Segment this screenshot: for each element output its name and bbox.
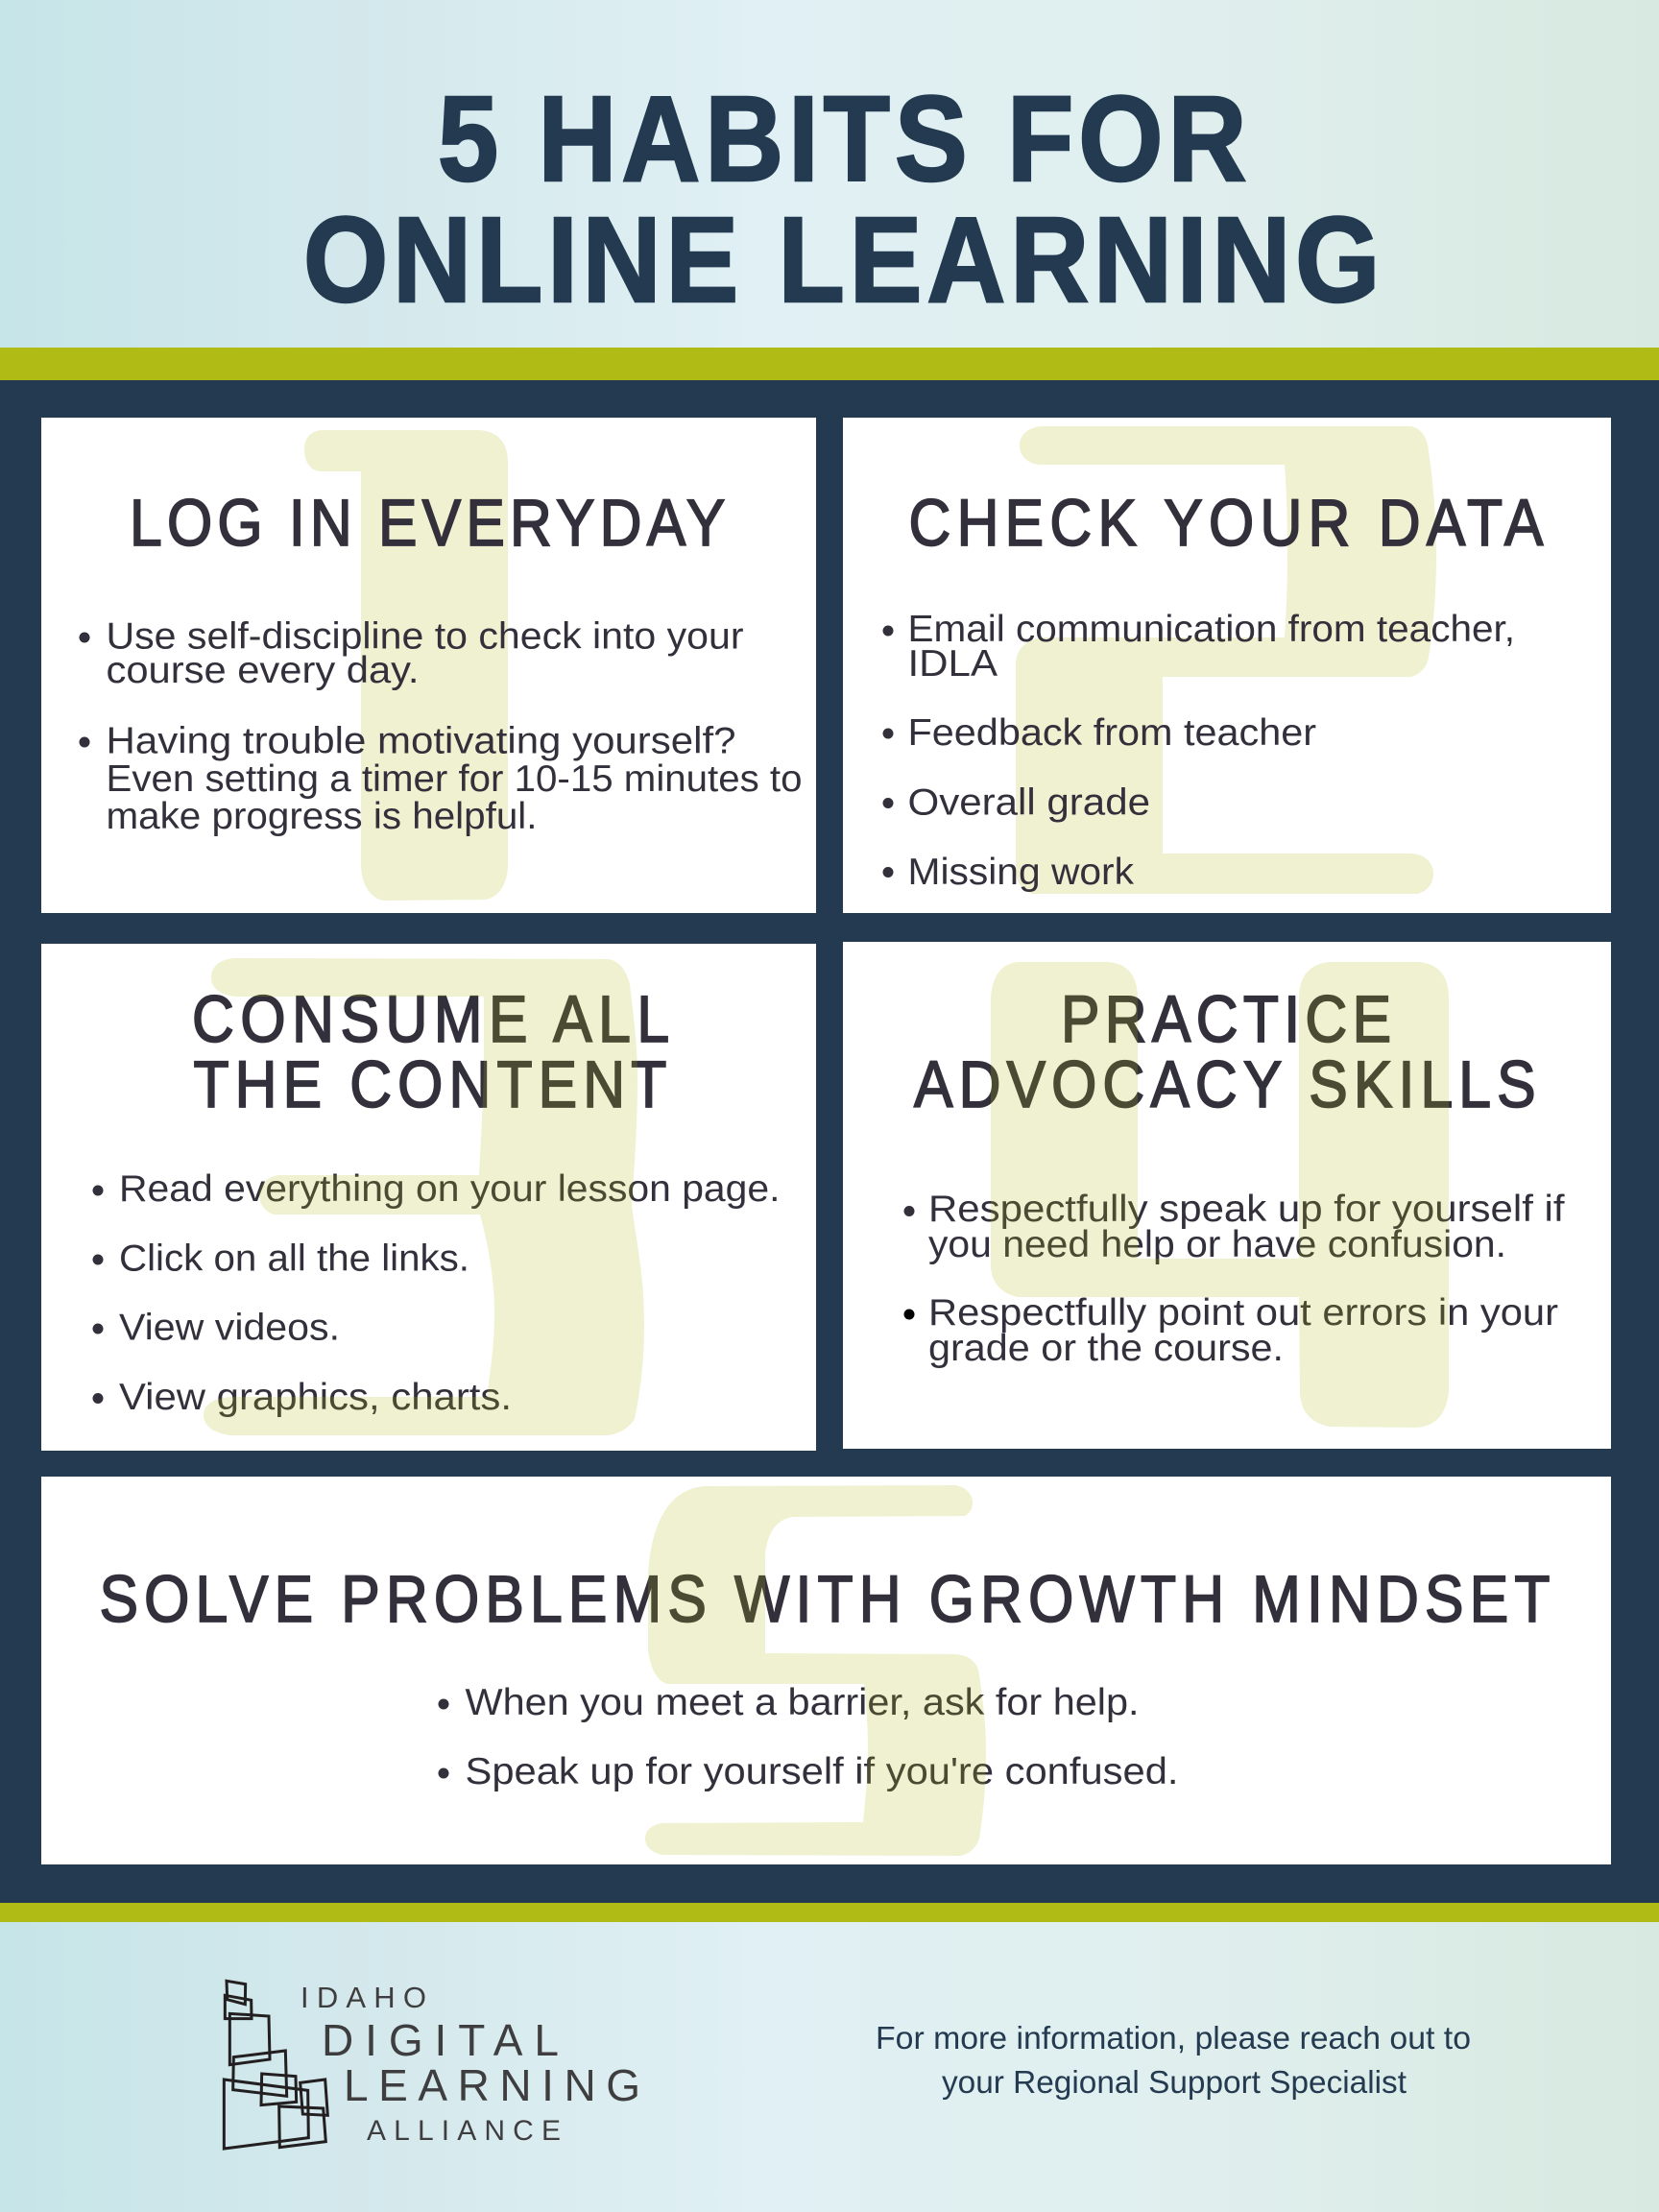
bullet list: content: View videos. <box>119 1308 340 1348</box>
footer contact note: For more information, please reach out to <box>876 2020 1471 2056</box>
logo: idaho digital learning alliance <box>224 1981 640 2149</box>
bullet list: advocacy: Respectfully point out errors in your <box>928 1292 1558 1334</box>
logo wordmark: ALLIANCE <box>367 2115 561 2147</box>
bullet list: data: Feedback from teacher <box>908 712 1316 754</box>
bullet list: data: Overall grade <box>908 781 1150 824</box>
footer background <box>0 1922 1659 2212</box>
bullet list: log in: Having trouble motivating yourself? <box>106 720 735 762</box>
bullet list: data <box>883 609 1515 893</box>
bullet list: advocacy: you need help or have confusion. <box>928 1224 1506 1265</box>
numeral 3 <box>204 958 644 1435</box>
icon: stacked rectangles <box>224 1981 327 2149</box>
title: 5 HABITS FOR <box>438 71 1246 206</box>
bullet list: data: IDLA <box>908 643 998 685</box>
header background <box>0 0 1659 348</box>
numeral 5 <box>645 1485 986 1856</box>
bullet list: growth mindset: When you meet a barrier, ask for help. <box>465 1682 1139 1723</box>
logo wordmark: IDAHO <box>301 1981 426 2014</box>
footer contact note: your Regional Support Specialist <box>942 2064 1407 2100</box>
title: ONLINE LEARNING <box>303 192 1380 327</box>
logo wordmark: LEARNING <box>344 2060 640 2110</box>
panel: consume all the content <box>41 944 816 1451</box>
panel: check your data <box>843 418 1611 913</box>
heading: log in everyday: LOG IN EVERYDAY <box>130 485 725 560</box>
bullet list: growth mindset: Speak up for yourself if you're confused. <box>465 1751 1179 1792</box>
bullet list: content: View graphics, charts. <box>119 1377 512 1418</box>
numeral 1 <box>304 430 508 901</box>
bullet list: advocacy: Respectfully speak up for yourself if <box>928 1189 1565 1230</box>
bullet list: advocacy <box>904 1189 1565 1369</box>
logo wordmark <box>301 1981 640 2147</box>
heading: consume all the content <box>192 981 669 1121</box>
bullet list: log in: course every day. <box>106 650 420 691</box>
panel: practice advocacy skills <box>843 942 1611 1449</box>
bullet list: log in: make progress is helpful. <box>106 796 538 837</box>
bullet list: content <box>92 1168 780 1418</box>
numeral 4 <box>991 962 1449 1428</box>
heading: practice advocacy skills: PRACTICE <box>1061 981 1391 1056</box>
logo wordmark: DIGITAL <box>322 2015 559 2065</box>
heading: solve problems: SOLVE PROBLEMS WITH GROWTH MINDSET <box>100 1561 1550 1636</box>
heading: consume all the content: CONSUME ALL <box>192 981 669 1056</box>
bullet list: growth mindset <box>438 1682 1179 1792</box>
numeral 2 <box>1016 426 1436 894</box>
bullet list: log in <box>79 616 803 837</box>
heading: check your data: CHECK YOUR DATA <box>908 485 1544 560</box>
panel: solve problems with growth mindset <box>41 1477 1611 1864</box>
title <box>303 71 1380 327</box>
bullet list: content: Click on all the links. <box>119 1238 469 1279</box>
heading: consume all the content: THE CONTENT <box>194 1046 666 1121</box>
panel: log in everyday <box>41 418 816 913</box>
bullet list: content: Read everything on your lesson page. <box>119 1168 780 1210</box>
bottom olive band <box>0 1903 1659 1922</box>
bullet list: data: Email communication from teacher, <box>908 609 1515 650</box>
heading: practice advocacy skills: ADVOCACY SKILLS <box>914 1046 1536 1121</box>
heading: practice advocacy skills <box>914 981 1536 1121</box>
bullet list: advocacy: grade or the course. <box>928 1328 1284 1369</box>
footer contact note <box>876 2020 1471 2100</box>
bullet list: log in: Even setting a timer for 10-15 minutes to <box>106 758 803 800</box>
bullet list: log in: Use self-discipline to check into your <box>106 616 744 657</box>
top olive band <box>0 348 1659 380</box>
bullet list: data: Missing work <box>908 852 1135 893</box>
